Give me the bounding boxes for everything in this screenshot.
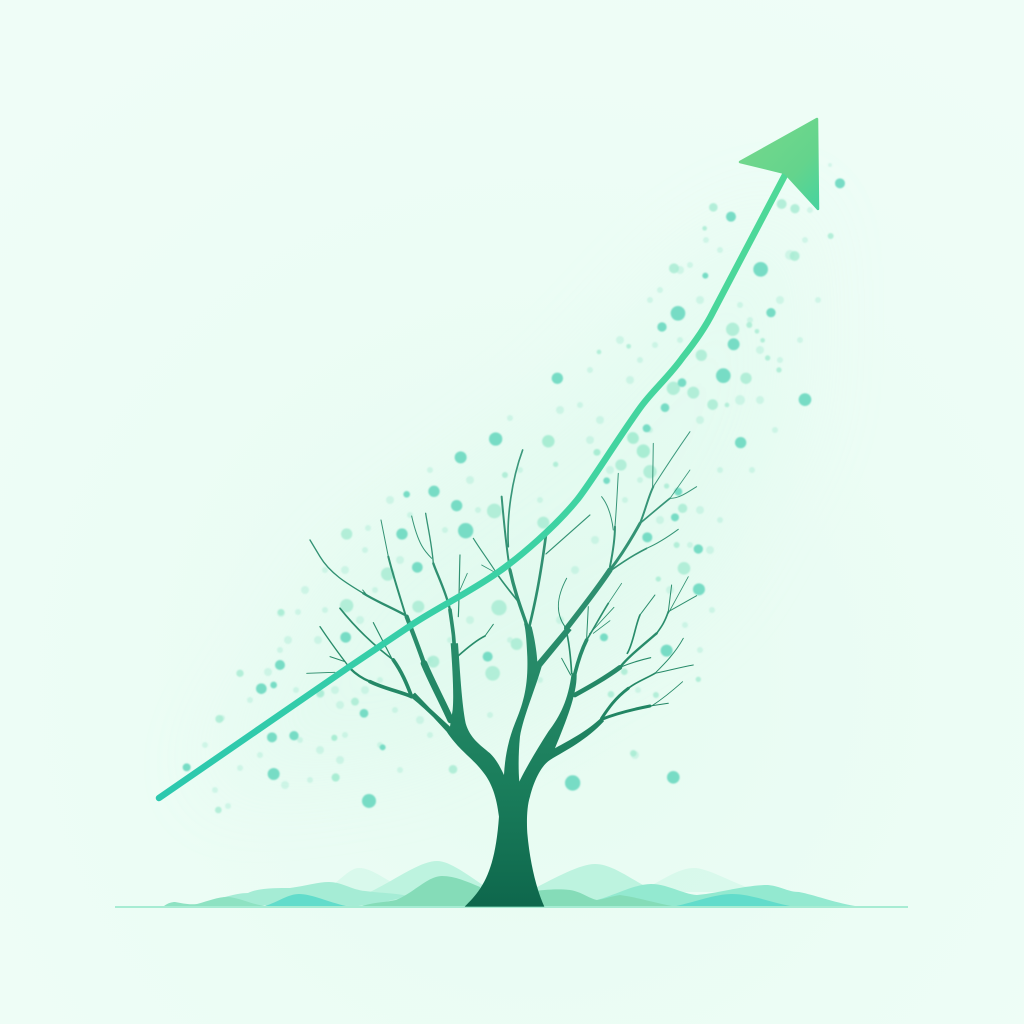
arrow bbox=[159, 119, 818, 798]
hills bbox=[164, 861, 855, 906]
ground line bbox=[115, 906, 908, 908]
strong upper particles bbox=[552, 178, 845, 448]
particle cloud bbox=[183, 163, 845, 813]
pale lower left particles bbox=[215, 609, 359, 813]
upper particles bbox=[542, 178, 845, 458]
far hills bbox=[320, 868, 760, 896]
centre limb bbox=[510, 570, 527, 627]
pale middle particles bbox=[331, 433, 701, 782]
trunk and main limbs bbox=[410, 623, 604, 907]
pale upper particles bbox=[542, 199, 834, 458]
soft particle haze bbox=[200, 200, 800, 790]
upper right limb bbox=[567, 570, 610, 628]
pale left ridge bbox=[197, 882, 408, 906]
far left limb bbox=[370, 682, 412, 697]
arrow line bbox=[159, 175, 785, 798]
middle twig bbox=[565, 627, 572, 673]
pale peaks bbox=[370, 861, 645, 906]
tree bbox=[307, 432, 697, 907]
right ridge bbox=[597, 884, 855, 906]
fourth left limb bbox=[450, 610, 454, 650]
branching right limb bbox=[575, 667, 620, 695]
strong middle particles bbox=[340, 432, 705, 808]
arrow head bbox=[740, 119, 818, 209]
second left limb bbox=[393, 660, 412, 697]
lower left particles bbox=[183, 609, 386, 813]
lowest right limb bbox=[602, 688, 628, 718]
teal hills bbox=[265, 894, 790, 906]
faint particles bbox=[202, 163, 832, 809]
right fork limb bbox=[575, 640, 587, 673]
strong lower left particles bbox=[183, 660, 386, 780]
green hills bbox=[362, 876, 672, 906]
small left ridge bbox=[164, 897, 265, 906]
middle particles bbox=[331, 432, 705, 808]
third left limb bbox=[424, 663, 451, 720]
